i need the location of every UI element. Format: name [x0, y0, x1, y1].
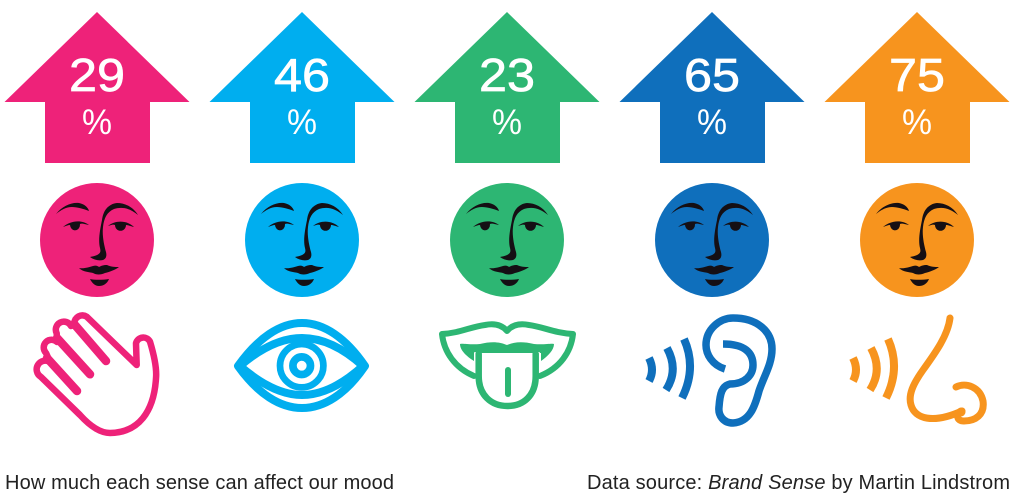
icon: nose with scent waves: [853, 318, 983, 421]
face: sight: [245, 183, 359, 297]
icon: ear with sound waves: [649, 318, 772, 423]
face: taste: [450, 183, 564, 297]
arrow: taste 23%: [414, 12, 600, 163]
arrow: hearing 65%: [620, 12, 804, 163]
arrow: touch 29%: [4, 12, 190, 163]
arrow: touch 29%: %: [82, 103, 112, 142]
caption: data source: Data source: Brand Sense by Martin Lindstrom: [587, 472, 1010, 494]
arrow: sight 46%: 46: [274, 49, 330, 101]
arrow: taste 23%: 23: [479, 49, 535, 101]
caption: left: How much each sense can affect our mood: [5, 472, 394, 494]
panel: hearing: [620, 12, 804, 423]
arrow: touch 29%: 29: [69, 49, 125, 101]
face: hearing: [655, 183, 769, 297]
arrow: taste 23%: %: [492, 103, 522, 142]
arrow: sight 46%: [210, 12, 394, 163]
arrow: sight 46%: %: [287, 103, 317, 142]
icon: mouth and tongue: [442, 324, 573, 406]
face: smell: [860, 183, 974, 297]
arrow: smell 75%: 75: [889, 49, 945, 101]
panel: sight: [210, 12, 394, 408]
panel: taste: [414, 12, 600, 406]
panel: smell: [824, 12, 1010, 421]
arrow: hearing 65%: 65: [684, 49, 740, 101]
face: touch: [40, 183, 154, 297]
arrow: smell 75%: %: [902, 103, 932, 142]
arrow: smell 75%: [824, 12, 1010, 163]
icon: hand: [37, 315, 156, 433]
panel: touch: [4, 12, 190, 433]
icon: eye: [238, 323, 365, 408]
arrow: hearing 65%: %: [697, 103, 727, 142]
